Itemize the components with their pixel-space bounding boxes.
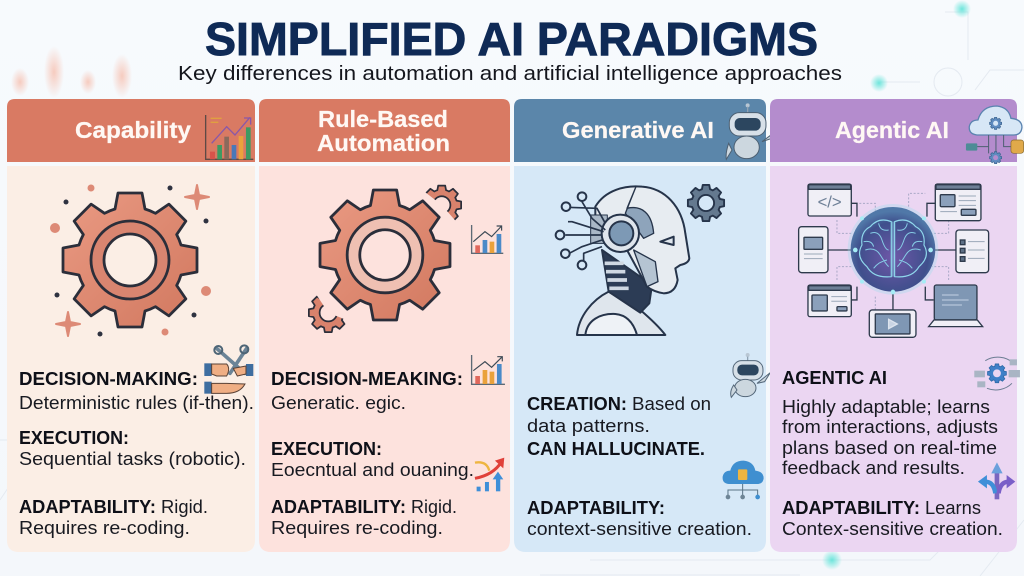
capability header xyxy=(7,99,255,162)
brain sphere xyxy=(848,204,938,295)
window: content xyxy=(935,184,981,221)
generative body xyxy=(514,166,766,552)
adaptability text xyxy=(527,498,752,539)
adaptability text: Requires re-coding. xyxy=(19,517,190,538)
rule-based header: Rule-Based xyxy=(318,106,448,132)
agentic description: Highly adaptable; learns xyxy=(782,396,990,417)
icon: small bar chart xyxy=(472,225,503,253)
icon: cloud network xyxy=(966,106,1024,164)
rule-based header: Automation xyxy=(317,130,450,156)
generative header: Generative AI xyxy=(562,117,714,143)
window: code: </> xyxy=(818,193,842,212)
adaptability text: Contex-sensitive creation. xyxy=(782,518,1003,539)
agentic body xyxy=(770,166,1017,552)
adaptability text: Learns xyxy=(925,497,981,518)
agentic text xyxy=(782,368,1003,539)
rule-based header xyxy=(259,99,510,162)
adaptability text xyxy=(271,496,457,538)
icon: robot head profile xyxy=(556,186,689,335)
agentic description xyxy=(782,396,998,478)
panel: rule-based automation xyxy=(259,99,510,552)
adaptability text: ADAPTABILITY: xyxy=(782,498,920,518)
adaptability text: Rigid. xyxy=(411,496,457,517)
panel: agentic ai xyxy=(770,99,1024,552)
agentic description: feedback and results. xyxy=(782,457,965,478)
adaptability text: ADAPTABILITY: xyxy=(19,497,156,517)
adaptability text: ADAPTABILITY: xyxy=(271,497,406,517)
icon: hands with tools xyxy=(204,345,253,394)
execution text: EXECUTION: xyxy=(271,439,382,459)
icon: bar chart with trend line xyxy=(206,115,253,159)
adaptability text: ADAPTABILITY: xyxy=(527,498,665,518)
agentic header xyxy=(770,99,1017,162)
video player xyxy=(869,310,916,337)
adaptability text: Rigid. xyxy=(161,496,208,517)
rule-based body xyxy=(259,166,510,552)
icon: gears xyxy=(307,184,463,332)
creation text xyxy=(527,393,711,436)
agentic header: Agentic AI xyxy=(835,117,949,143)
decision-making text xyxy=(19,369,254,413)
adaptability text: context-sensitive creation. xyxy=(527,518,752,539)
adaptability text xyxy=(782,497,1003,539)
panel: capability xyxy=(7,99,255,552)
execution text: Sequential tasks (robotic). xyxy=(19,448,246,469)
rule-based text xyxy=(271,369,474,538)
diagram: brain connected to apps xyxy=(799,184,989,337)
creation text: Based on xyxy=(632,393,711,414)
icon: gear cycle xyxy=(974,357,1020,390)
decision-meaking text xyxy=(271,369,463,413)
creation text: data patterns. xyxy=(527,415,650,436)
window: lower left xyxy=(808,285,851,317)
hallucinate text: CAN HALLUCINATE. xyxy=(527,439,705,459)
adaptability text: Requires re-coding. xyxy=(271,517,443,538)
adaptability text xyxy=(19,496,208,538)
creation text: CREATION: xyxy=(527,394,627,414)
decision-meaking text: DECISION-MEAKING: xyxy=(271,369,463,389)
agentic description: from interactions, adjusts xyxy=(782,416,998,437)
execution text xyxy=(271,439,474,480)
generative header xyxy=(514,99,766,162)
icon: decision bar chart xyxy=(472,355,505,384)
tablet: left xyxy=(799,227,828,273)
decision-making text: Deterministic rules (if-then). xyxy=(19,392,254,413)
icon: waving robot in header xyxy=(726,103,779,159)
tablet: right xyxy=(956,230,989,273)
execution text xyxy=(19,428,246,469)
decision-meaking text: Generatic. egic. xyxy=(271,392,406,413)
window: code xyxy=(808,184,851,216)
icon: branching arrows xyxy=(978,462,1015,499)
icon: small robot xyxy=(731,353,770,397)
generative text xyxy=(527,393,752,539)
subtitle: Key differences in automation and artificial intelligence approaches xyxy=(178,62,842,85)
capability text xyxy=(19,369,254,538)
agentic description: plans based on real-time xyxy=(782,437,997,458)
agentic ai heading: AGENTIC AI xyxy=(782,368,887,388)
laptop xyxy=(929,285,983,327)
execution text: EXECUTION: xyxy=(19,428,129,448)
icon: gear with sparkles xyxy=(50,184,211,336)
icon: red and blue growth arrows xyxy=(475,458,504,491)
icon: cloud chip xyxy=(723,461,764,499)
decision-making text: DECISION-MAKING: xyxy=(19,369,198,389)
capability body xyxy=(7,166,255,552)
execution text: Eoecntual and ouaning. xyxy=(271,459,474,480)
icon: gear xyxy=(688,185,724,221)
capability header: Capability xyxy=(75,117,191,143)
title: SIMPLIFIED AI PARADIGMS xyxy=(205,13,818,65)
panel: generative ai xyxy=(514,99,779,552)
